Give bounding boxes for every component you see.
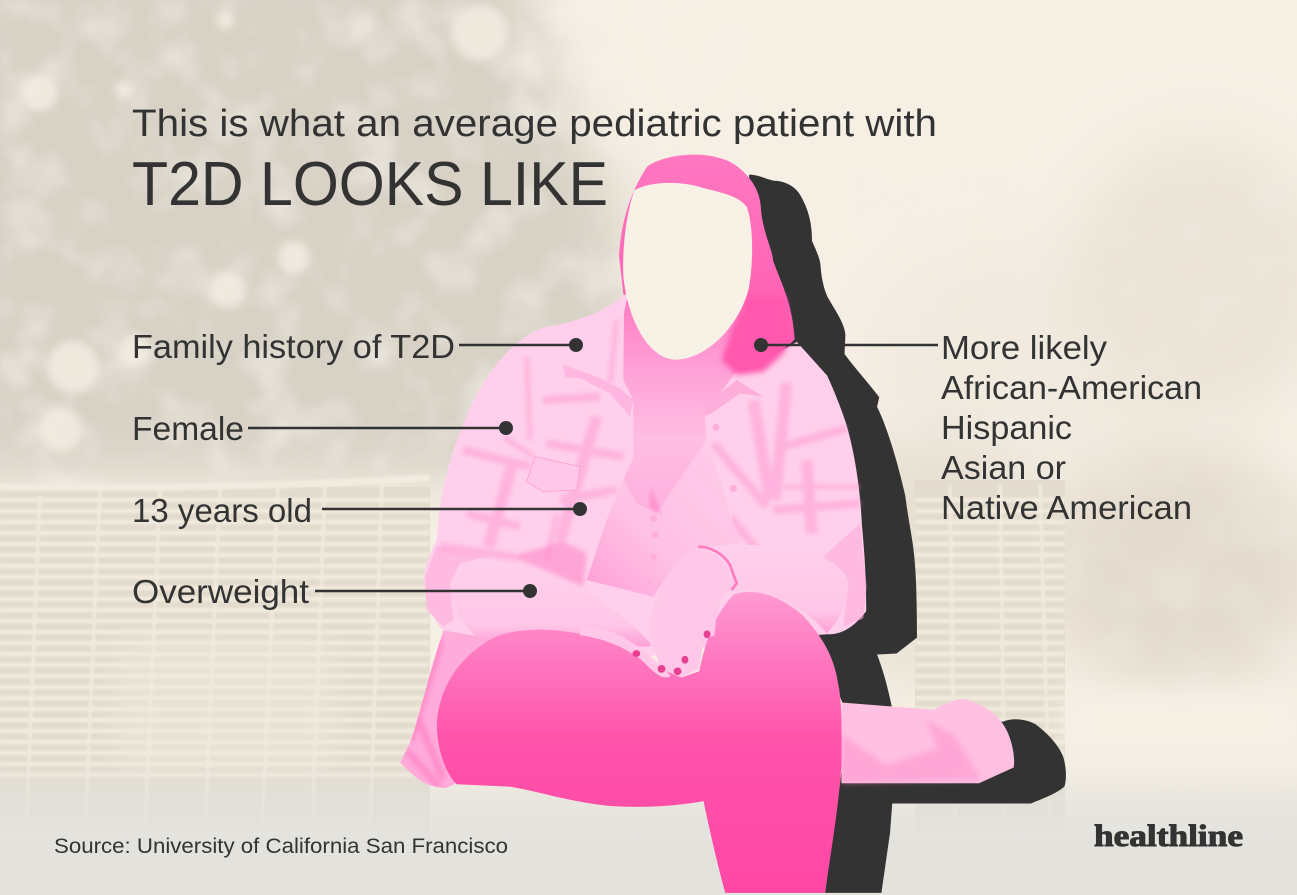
callout: race and ethnicity: More likely <box>941 329 1108 366</box>
shirt hem lower left <box>400 630 487 788</box>
neck and chest <box>623 300 753 513</box>
left forearm <box>450 560 653 647</box>
left collar <box>563 365 633 417</box>
right forearm <box>720 545 848 633</box>
jeans <box>437 592 842 893</box>
torso details <box>425 297 867 647</box>
hand <box>649 548 729 647</box>
callout: overweight: Overweight <box>132 573 309 610</box>
callout: female: Female <box>132 410 244 447</box>
callout: race and ethnicity: Native American <box>941 489 1192 526</box>
right collar <box>703 380 763 417</box>
title line 2: T2D LOOKS LIKE <box>132 150 608 219</box>
left sleeve cuff <box>425 547 487 627</box>
breast pocket <box>527 457 580 492</box>
callout: race and ethnicity: Hispanic <box>941 409 1072 446</box>
fingers over thigh <box>580 627 671 677</box>
shade at elbow <box>510 540 587 587</box>
shoe shade <box>842 719 981 783</box>
pink duotone figure <box>400 155 866 788</box>
right sleeve cuff <box>823 523 867 627</box>
callout: family history <box>132 328 583 365</box>
shoe <box>842 699 1014 783</box>
legs <box>437 183 1014 893</box>
cleavage shade <box>650 487 662 513</box>
blank face <box>623 183 752 360</box>
callout: race and ethnicity <box>754 329 1202 526</box>
callout: female <box>132 410 513 447</box>
callout: age: 13 years old <box>132 492 312 529</box>
callout: race and ethnicity: Asian or <box>941 449 1066 486</box>
nails <box>632 630 711 675</box>
callout: family history: Family history of T2D <box>132 328 455 365</box>
buttons on top <box>646 424 737 585</box>
title line 1: This is what an average pediatric patient with <box>132 103 937 145</box>
fingers on knee <box>649 614 717 678</box>
hair <box>619 155 795 371</box>
dark shadow silhouette of seated girl <box>747 175 1066 893</box>
bench back slats <box>0 478 1297 832</box>
source note: Source: University of California San Francisco <box>54 835 508 858</box>
healthline logo: healthline <box>1094 818 1243 853</box>
shirt <box>400 294 866 788</box>
callout: race and ethnicity: African-American <box>941 369 1202 406</box>
callout: overweight <box>132 573 537 610</box>
wristband <box>698 547 737 590</box>
inner top <box>587 440 740 597</box>
plaid pattern <box>440 320 860 560</box>
callout: age <box>132 492 587 529</box>
hair over shoulder <box>722 297 790 375</box>
